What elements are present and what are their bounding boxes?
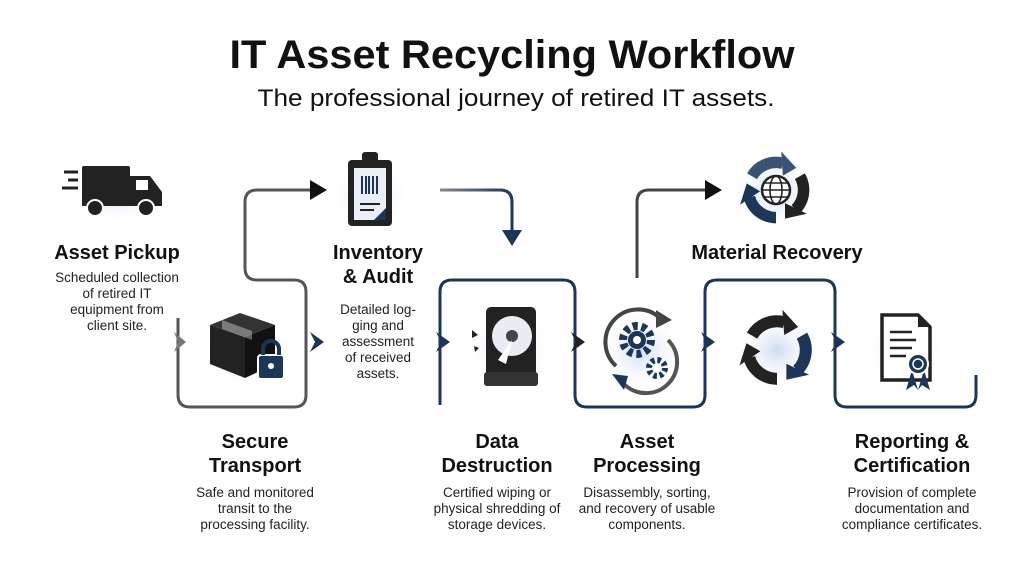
heading: Data Destruction: Data	[475, 431, 520, 453]
text: transport description: processing facility.	[200, 517, 310, 532]
icon: gears	[596, 308, 684, 393]
text: inventory description: assets.	[357, 366, 399, 381]
heading: Inventory & Audit: Inventory	[333, 242, 424, 264]
text: processing description: components.	[608, 517, 686, 532]
text: asset pickup description: client site.	[87, 318, 147, 333]
text: destruction description: Certified wiping or	[443, 485, 552, 500]
text: inventory description: of received	[345, 350, 411, 365]
subtitle: The professional journey of retired IT assets.	[258, 85, 774, 112]
icon: clipboard	[330, 152, 410, 231]
text: reporting description: Provision of complete	[847, 485, 977, 500]
text: inventory description: assessment	[342, 334, 414, 349]
icon: box with lock	[197, 312, 293, 388]
text: asset pickup description: of retired IT	[82, 286, 152, 301]
text: inventory description: Detailed log-	[340, 302, 416, 317]
text: asset pickup description: equipment from	[70, 302, 164, 317]
text: asset pickup description: Scheduled collection	[55, 270, 179, 285]
text: processing description: Disassembly, sorting,	[583, 485, 711, 500]
text: reporting description: compliance certificates.	[842, 517, 982, 532]
heading: Data Destruction: Destruction	[441, 455, 553, 477]
text: inventory description: ging and	[352, 318, 404, 333]
text: transport description: Safe and monitored	[196, 485, 314, 500]
heading: Asset Processing: Asset	[620, 431, 675, 453]
text: transport description: transit to the	[218, 501, 292, 516]
text: processing description: and recovery of usable	[579, 501, 715, 516]
arrowheads	[310, 180, 722, 246]
icon: recycle globe	[731, 151, 821, 230]
heading: Material Recovery: Material Recovery	[691, 242, 863, 264]
heading: Reporting & Certification: Reporting &	[855, 431, 969, 453]
heading: Inventory & Audit: & Audit	[343, 266, 414, 288]
text: destruction description: storage devices.	[448, 517, 546, 532]
icon: recycle	[732, 310, 824, 392]
chevrons	[174, 332, 845, 352]
heading: Asset Pickup: Asset Pickup	[54, 242, 180, 264]
icon: hard drive	[468, 307, 552, 392]
heading: Reporting & Certification: Certification	[854, 455, 970, 477]
text: destruction description: physical shredding of	[434, 501, 561, 516]
icon: certificate	[865, 310, 945, 390]
flow lines	[178, 190, 976, 407]
heading: Asset Processing: Processing	[593, 455, 701, 477]
text: reporting description: documentation and	[855, 501, 969, 516]
heading: Secure Transport: Secure	[222, 431, 288, 453]
heading: Secure Transport: Transport	[209, 455, 301, 477]
icon: truck	[62, 166, 166, 223]
title: IT Asset Recycling Workflow	[230, 33, 795, 77]
